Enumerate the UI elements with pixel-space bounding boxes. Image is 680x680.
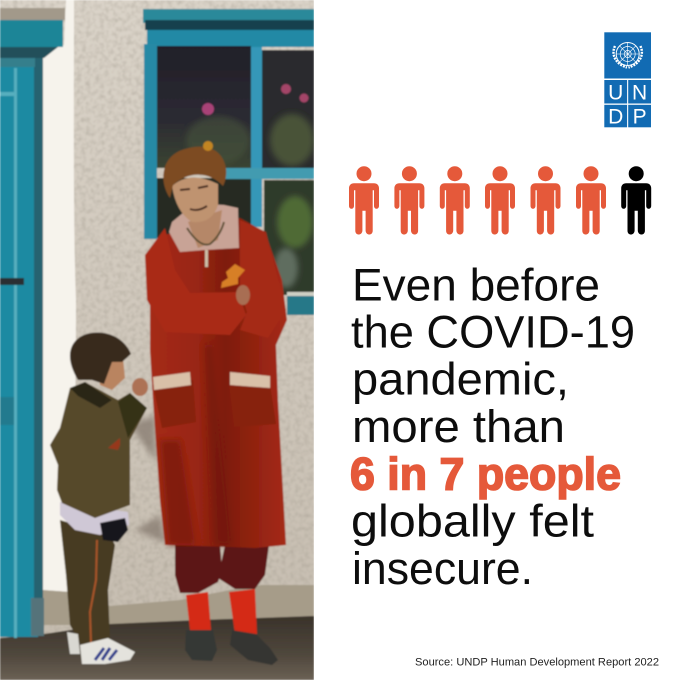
letters: U <box>608 82 623 104</box>
headline text: insecure. <box>352 543 533 594</box>
headscarf <box>163 147 226 198</box>
figure: boy <box>50 333 148 664</box>
panel: photo of woman and boy by a wall <box>0 0 314 680</box>
zip <box>205 250 208 267</box>
trousers <box>175 545 269 593</box>
letter tiles <box>604 80 627 104</box>
wall shadows <box>130 415 165 542</box>
left door <box>0 8 65 638</box>
pockets <box>153 380 196 428</box>
headline text: pandemic, <box>352 354 569 404</box>
letters: P <box>633 106 647 128</box>
letters: N <box>632 82 647 104</box>
trouser stripe <box>90 540 97 643</box>
icon row: seven people <box>349 166 651 234</box>
person 2 <box>394 166 424 234</box>
person 3 <box>440 166 470 234</box>
headline text: Even before <box>352 260 600 311</box>
hand on coat <box>132 378 148 396</box>
source note: Source: UNDP Human Development Report 2022 <box>415 657 659 669</box>
shoes <box>185 630 217 661</box>
letters <box>608 82 647 128</box>
hand <box>236 285 250 305</box>
face <box>172 177 218 222</box>
window frame <box>143 9 314 23</box>
headline text: more than <box>352 401 565 452</box>
door lintel <box>0 8 65 20</box>
wall base stones <box>42 585 314 625</box>
boy face <box>97 358 125 390</box>
letters: D <box>608 106 623 128</box>
long red coat <box>150 218 287 548</box>
coat folds <box>160 345 232 545</box>
jacket badges <box>108 438 120 450</box>
sleeves crossed <box>145 228 246 335</box>
shirt hem <box>60 502 129 535</box>
person 4 <box>485 166 515 234</box>
headline text: globally felt <box>351 496 595 547</box>
boy hair <box>70 333 131 384</box>
collar <box>169 203 239 252</box>
jacket <box>50 382 147 518</box>
red socks <box>186 589 257 634</box>
window panes <box>157 46 251 168</box>
glove <box>100 518 128 542</box>
door leaf <box>0 58 38 637</box>
window <box>143 9 314 315</box>
person 6 <box>576 166 606 234</box>
highlight: 6 in 7 people: 6 in 7 people <box>350 448 621 500</box>
necklace <box>187 222 224 245</box>
shoe stripes <box>95 648 117 660</box>
white door-side strip <box>40 0 76 592</box>
wall grain <box>0 0 314 640</box>
headline text <box>350 260 635 594</box>
logo emblem box <box>604 32 651 78</box>
figure: woman <box>145 141 287 665</box>
foliage and flowers <box>270 114 314 166</box>
shoes <box>67 632 80 654</box>
person 1 <box>349 166 379 234</box>
person 7 (black) <box>621 166 651 234</box>
window mullions <box>251 47 262 227</box>
logo: UNDP <box>604 32 651 128</box>
boy trousers <box>60 520 115 646</box>
headline text: the COVID-19 <box>351 307 635 358</box>
scarf knot <box>203 141 213 151</box>
ground <box>0 616 314 680</box>
wall <box>0 0 314 640</box>
eyes and mouth <box>180 186 208 210</box>
person 5 <box>530 166 560 234</box>
UN emblem <box>614 42 642 68</box>
jacket collar <box>70 382 112 408</box>
chest embroidery <box>221 264 245 288</box>
